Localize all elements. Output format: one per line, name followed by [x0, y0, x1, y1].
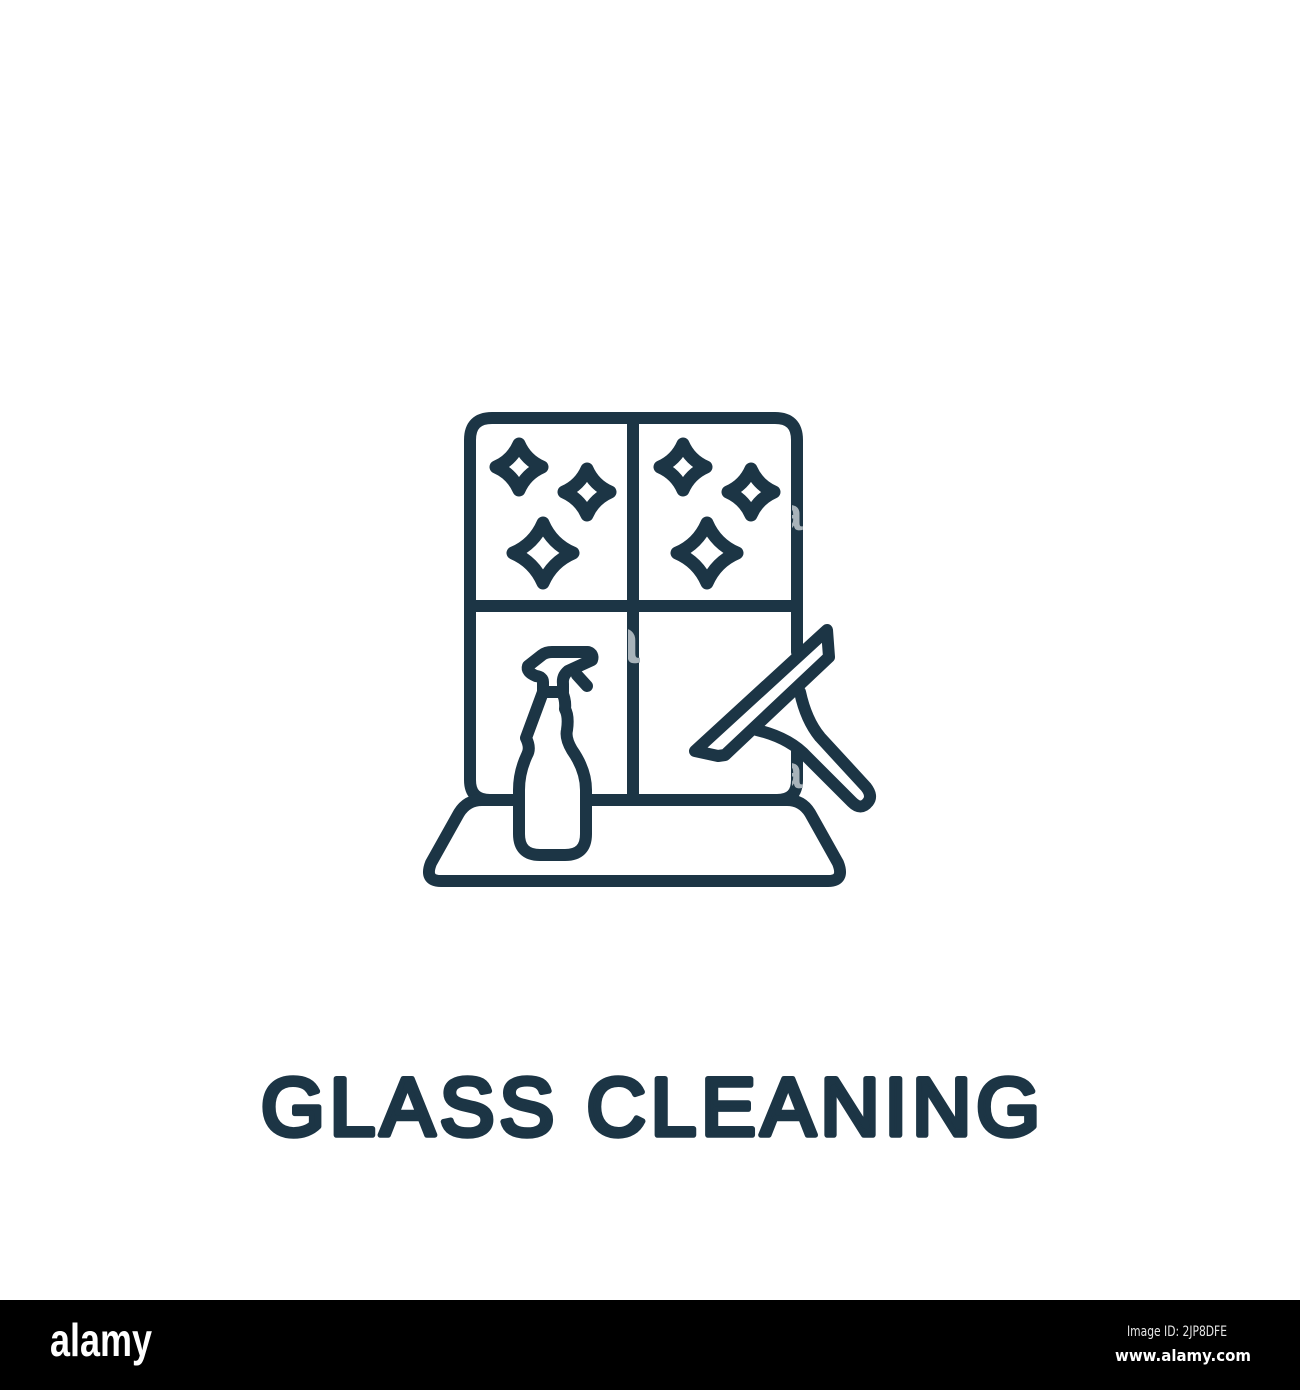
title: GLASS CLEANING	[261, 1062, 1040, 1153]
watermark fragments: a	[777, 746, 803, 798]
footer bar	[0, 1300, 1300, 1390]
watermark fragments: a	[604, 605, 640, 677]
image id: Image ID: 2JP8DFE	[1127, 1324, 1227, 1340]
watermark fragments	[628, 505, 803, 788]
icon: sparkles upper right pane	[660, 444, 774, 583]
icon: window sill	[429, 800, 840, 881]
window frame	[470, 418, 797, 800]
icon: window with spray bottle and squeegee	[429, 418, 870, 881]
alamy logo: alamy	[50, 1314, 152, 1366]
website: www.alamy.com	[1115, 1346, 1251, 1365]
icon: squeegee	[695, 630, 870, 806]
watermark fragments: a	[777, 488, 803, 540]
icon: sparkles upper left pane	[496, 444, 610, 583]
icon: spray bottle	[519, 652, 592, 855]
